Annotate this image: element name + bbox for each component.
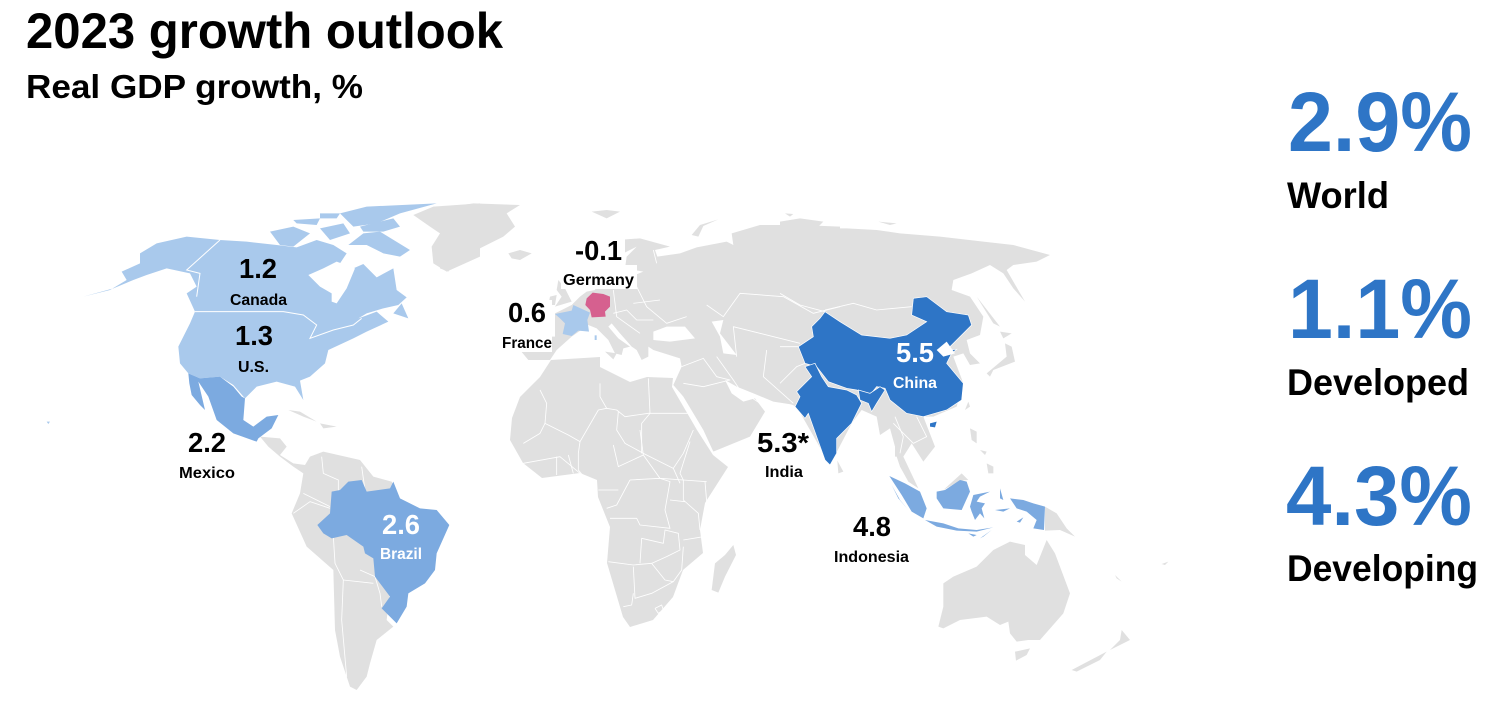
label: Brazil: Brazil (380, 546, 422, 563)
title: 2023 growth outlook (26, 3, 503, 59)
label: Mexico: Mexico (179, 465, 235, 482)
stat: World: World (1287, 175, 1389, 216)
stat: Developed (1287, 262, 1472, 403)
label: Canada: Canada (230, 292, 287, 309)
Canada and U.S. (47, 203, 437, 424)
label: U.S.: U.S. (238, 359, 269, 376)
label: Brazil (380, 509, 422, 563)
label: India: India (765, 464, 803, 481)
label: India: 5.3* (757, 427, 809, 458)
Corsica (595, 335, 597, 340)
label: Germany (563, 235, 634, 289)
label: Indonesia: Indonesia (834, 549, 909, 566)
Indonesia (889, 476, 1045, 538)
stat: Developing: Developing (1287, 548, 1478, 589)
label: China: China (893, 375, 937, 392)
label: Mexico (179, 427, 235, 482)
country borders (293, 250, 927, 677)
India (795, 363, 885, 465)
label: Canada: 1.2 (239, 253, 277, 284)
label: Indonesia: 4.8 (853, 511, 891, 542)
label: China: 5.5 (896, 337, 934, 368)
China (798, 297, 972, 427)
label: India (757, 427, 809, 481)
Mexico (188, 373, 278, 442)
France (555, 305, 590, 336)
label: Indonesia (834, 511, 909, 566)
Brazil (317, 480, 449, 623)
label: Brazil: 2.6 (382, 509, 420, 540)
Germany (585, 293, 610, 317)
stat: Developing: 4.3% (1286, 449, 1472, 543)
label: France: France (502, 335, 552, 352)
subtitle: Real GDP growth, % (26, 68, 363, 105)
stat: Developing (1286, 449, 1478, 589)
label: U.S.: 1.3 (235, 320, 273, 351)
stat: Developed: Developed (1287, 362, 1469, 403)
stat: Developed: 1.1% (1288, 262, 1472, 356)
label: Mexico: 2.2 (188, 427, 226, 458)
label: Germany: -0.1 (575, 235, 622, 266)
stat: World (1287, 75, 1472, 216)
land: grey countries (260, 203, 1168, 690)
label: U.S. (235, 320, 273, 376)
label: Germany: Germany (563, 272, 634, 289)
label: France: 0.6 (508, 297, 546, 328)
label: China (893, 337, 937, 392)
label backdrops (500, 238, 637, 352)
label: France (502, 297, 552, 352)
world map (47, 203, 1168, 690)
stat: World: 2.9% (1288, 75, 1472, 169)
label: Canada (230, 253, 287, 309)
